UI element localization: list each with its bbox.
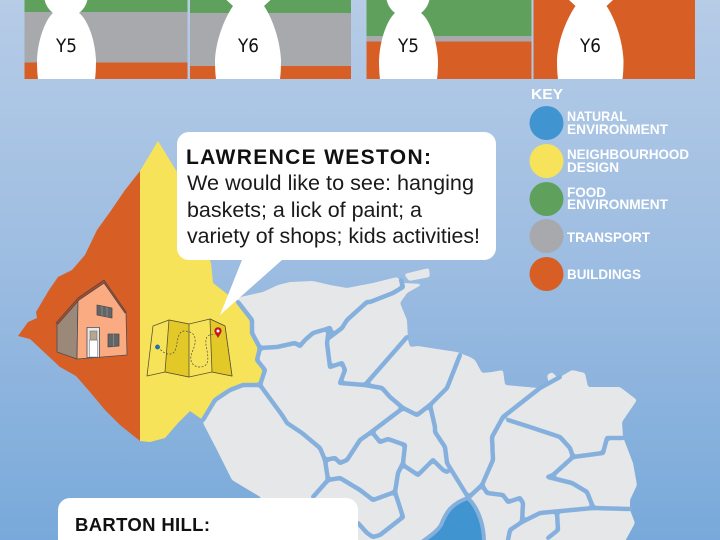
callout heading: BARTON HILL: — [75, 514, 210, 535]
callout body text: variety of shops; kids activities! — [187, 224, 480, 248]
callout: Lawrence Weston — [177, 132, 496, 315]
map of wards — [18, 141, 637, 540]
panel: year 5 and 6 chart, left — [24, 0, 351, 79]
land — [190, 277, 637, 540]
Y5 stacked bar — [24, 0, 188, 79]
key heading: KEY — [531, 86, 563, 103]
key item: neighbourhood design: DESIGN — [567, 159, 619, 175]
islands — [404, 268, 558, 385]
callout: Barton Hill — [58, 498, 358, 540]
key — [530, 86, 689, 291]
key item: buildings — [530, 257, 641, 291]
Y5 stacked bar — [366, 0, 532, 79]
Y6 stacked bar — [534, 0, 695, 79]
key item: natural environment: NATURAL — [567, 108, 627, 124]
key item: neighbourhood design — [530, 144, 689, 178]
key item: natural environment: ENVIRONMENT — [567, 121, 668, 137]
Y6 stacked bar — [190, 0, 351, 79]
key item: food environment: FOOD — [567, 184, 606, 200]
callout body text: We would like to see: hanging — [187, 171, 474, 195]
icon: folded map — [147, 319, 232, 377]
lake — [422, 498, 484, 540]
key item: transport — [530, 219, 650, 253]
key item: food environment: ENVIRONMENT — [567, 196, 668, 212]
key item: buildings: BUILDINGS — [567, 266, 641, 282]
ward boundary roads — [203, 280, 630, 540]
key item: natural environment — [530, 106, 668, 140]
panel: year 5 and 6 chart, right — [366, 0, 695, 79]
Y6 stacked bar: Y6 — [237, 35, 259, 57]
key item: food environment — [530, 182, 668, 216]
callout heading: LAWRENCE WESTON: — [186, 146, 431, 169]
Y6 stacked bar: Y6 — [579, 35, 601, 57]
icon: house — [56, 280, 127, 359]
ward: Lawrence Weston, neighbourhood design half — [140, 141, 265, 442]
Y5 stacked bar: Y5 — [55, 35, 77, 57]
callout body text: baskets; a lick of paint; a — [187, 198, 422, 222]
ward: Lawrence Weston, buildings half — [18, 171, 140, 441]
Y5 stacked bar: Y5 — [397, 35, 419, 57]
key item: neighbourhood design: NEIGHBOURHOOD — [567, 146, 689, 162]
key item: transport: TRANSPORT — [567, 229, 650, 245]
